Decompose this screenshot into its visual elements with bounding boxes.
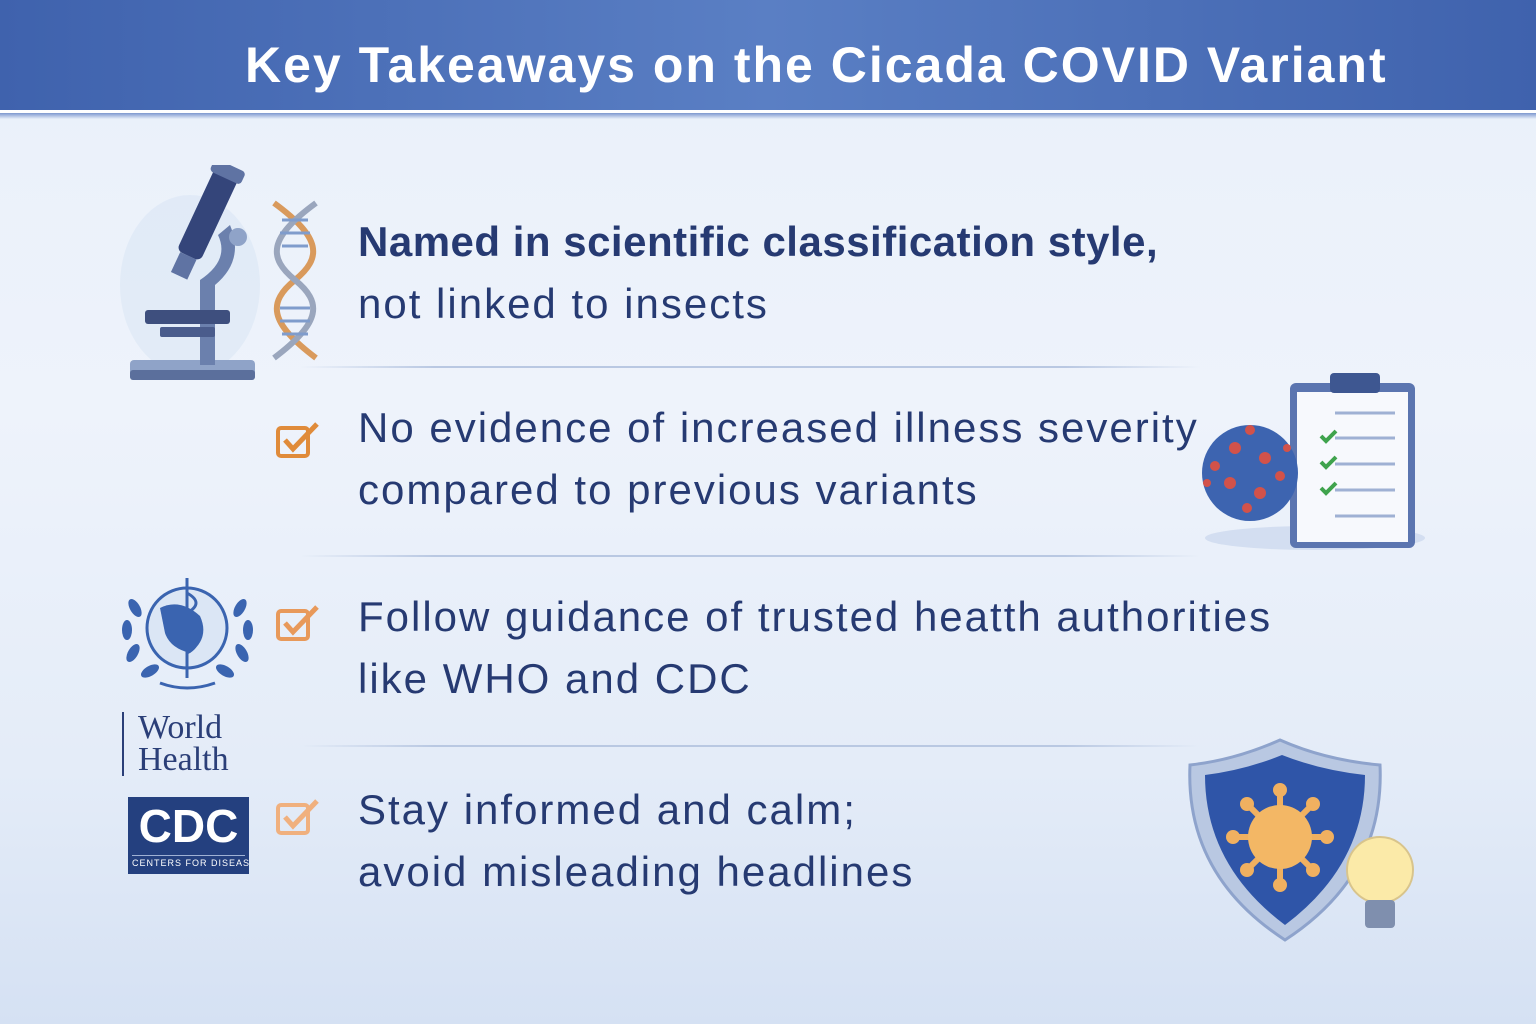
text block: takeaway 4: Stay informed and calm; xyxy=(358,786,857,833)
text block: takeaway 1 xyxy=(358,218,1158,327)
text block: takeaway 2: No evidence of increased illness severity xyxy=(358,404,1199,451)
text block: takeaway 3: Follow guidance of trusted heatth authorities xyxy=(358,593,1272,640)
text block: takeaway 4 xyxy=(358,786,914,895)
text: World Health xyxy=(122,712,229,776)
icon: microscope xyxy=(120,165,260,380)
icon: WHO emblem xyxy=(122,578,253,690)
text block: takeaway 1: not linked to insects xyxy=(358,280,769,327)
text block: takeaway 4: avoid misleading headlines xyxy=(358,848,914,895)
icon: checkbox 1 xyxy=(276,422,319,458)
icon: checkbox 3 xyxy=(276,605,319,641)
logo: CDC: CDC xyxy=(139,800,238,852)
text block: takeaway 3: like WHO and CDC xyxy=(358,655,752,702)
text: World Health: Health xyxy=(138,741,229,778)
text block: takeaway 2 xyxy=(358,404,1199,513)
text block: takeaway 3 xyxy=(358,593,1272,702)
logo: CDC xyxy=(128,797,249,874)
text block: takeaway 2: compared to previous variants xyxy=(358,466,979,513)
icon: virus and clipboard xyxy=(1202,373,1425,550)
title: Key Takeaways on the Cicada COVID Variant xyxy=(245,37,1388,93)
icon: checkbox 4 xyxy=(276,799,319,835)
text: World Health: World xyxy=(138,709,222,746)
icon: DNA xyxy=(272,200,318,360)
text block: takeaway 1: Named in scientific classification style, xyxy=(358,218,1158,265)
icon: shield with virus and lightbulb xyxy=(1188,738,1414,942)
header bar xyxy=(0,0,1536,110)
